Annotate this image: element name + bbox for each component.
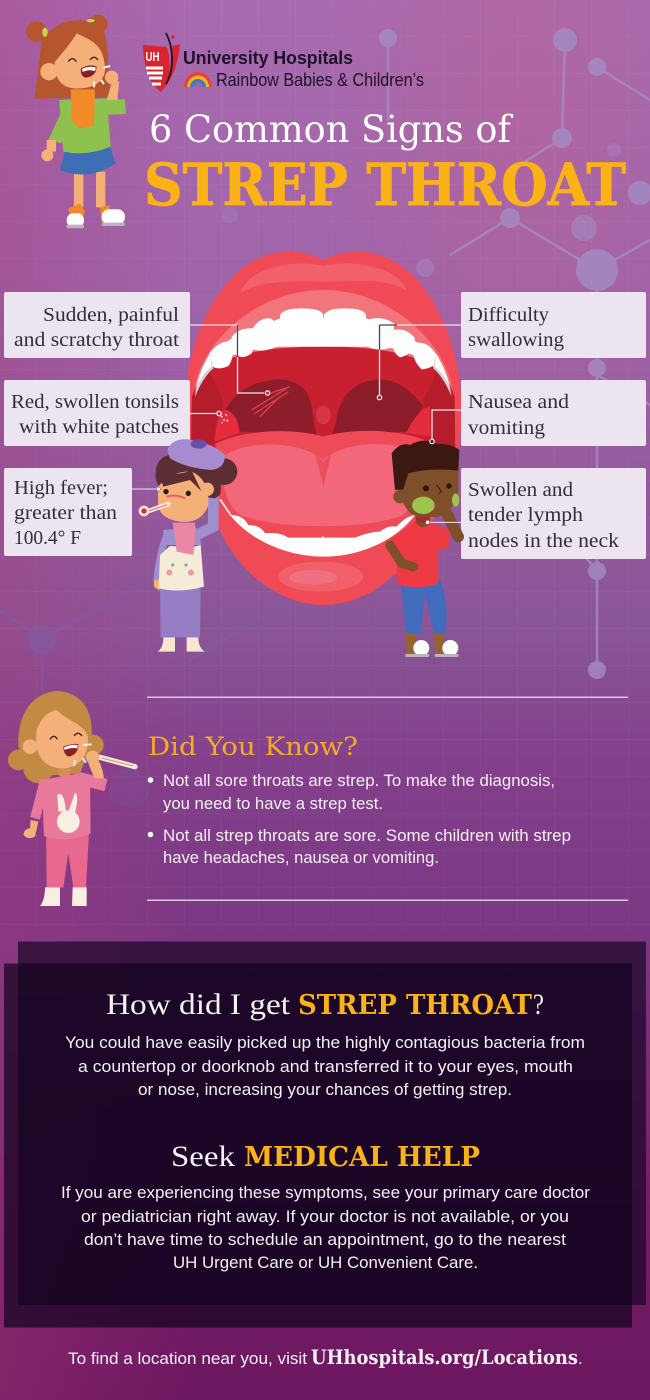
label: sudden painful throat: and scratchy throat xyxy=(14,329,179,351)
footer: To find a location near you, visit xyxy=(68,1349,307,1368)
throat interior xyxy=(191,347,455,453)
lymph callout dot xyxy=(430,521,462,524)
strep streaks xyxy=(252,387,290,417)
seek medical help section: Seek xyxy=(171,1140,235,1173)
label: nausea and vomiting xyxy=(461,380,646,446)
label: swollen lymph nodes: Swollen and xyxy=(468,479,573,501)
character: child with fever and ice pack xyxy=(132,439,237,652)
label: sudden painful throat: Sudden, painful xyxy=(43,304,179,326)
how did I get strep section: a countertop or doorknob and transferred it to your eyes, mouth xyxy=(78,1057,573,1076)
left tonsil xyxy=(215,410,239,442)
bullet 2: have headaches, nausea or vomiting. xyxy=(163,848,439,867)
dark panel back layer xyxy=(18,942,646,1305)
logo wordmark: University Hospitals xyxy=(183,47,353,68)
how did I get strep section: How did I get xyxy=(106,988,291,1021)
how did I get strep section xyxy=(65,988,585,1099)
footer: UHhospitals.org/Locations xyxy=(311,1345,578,1369)
seek medical help section: UH Urgent Care or UH Convenient Care. xyxy=(173,1253,478,1272)
mouth illustration xyxy=(185,252,462,605)
label: high fever: greater than xyxy=(14,502,117,524)
lips xyxy=(185,252,462,605)
upper gum xyxy=(193,290,453,397)
divider bottom xyxy=(147,900,628,901)
icon: rainbow xyxy=(184,72,212,87)
logo subtitle: Rainbow Babies & Children’s xyxy=(216,69,424,90)
right tonsil xyxy=(407,407,431,437)
did you know section xyxy=(148,732,571,867)
label: swollen lymph nodes: tender lymph xyxy=(468,504,583,526)
title: 6 Common Signs of xyxy=(149,108,513,151)
label: nausea and vomiting: vomiting xyxy=(468,417,545,439)
character: girl coughing with scarf xyxy=(26,15,126,228)
label: swollen lymph nodes: nodes in the neck xyxy=(468,530,620,552)
callout leader lines xyxy=(190,325,461,444)
seek medical help section: If you are experiencing these symptoms, see your primary care doctor xyxy=(61,1183,590,1202)
throat arch shadow xyxy=(223,379,317,435)
label: high fever: 100.4° F xyxy=(14,527,81,549)
bullet 2: Not all strep throats are sore. Some children with strep xyxy=(163,826,571,845)
fever callout dot xyxy=(132,487,156,490)
label: red swollen tonsils xyxy=(4,380,190,446)
uvula xyxy=(316,406,331,424)
did you know section: Did You Know? xyxy=(148,732,358,761)
icon: UH shield xyxy=(143,33,180,92)
icon: UH shield: UH xyxy=(146,50,160,64)
label: difficulty swallowing: swallowing xyxy=(468,329,564,351)
how did I get strep section: ? xyxy=(533,988,544,1021)
lower teeth xyxy=(230,515,415,557)
upper teeth xyxy=(209,308,437,369)
bullet 1 xyxy=(148,771,555,813)
how did I get strep section: You could have easily picked up the highly contagious bacteria from xyxy=(65,1033,585,1052)
bullet 1: you need to have a strep test. xyxy=(163,794,383,813)
tongue xyxy=(215,431,428,555)
label: sudden painful throat xyxy=(4,292,190,358)
label: high fever: High fever; xyxy=(14,477,108,499)
title xyxy=(144,108,626,219)
dark panel front layer xyxy=(4,964,632,1328)
character: girl with thermometer xyxy=(8,691,135,906)
seek medical help section: don’t have time to schedule an appointment, go to the nearest xyxy=(84,1230,566,1249)
logo xyxy=(143,33,424,92)
label: red swollen tonsils: Red, swollen tonsils xyxy=(11,391,179,413)
white patches xyxy=(221,414,228,423)
background molecule network xyxy=(0,28,650,808)
bullet 2 xyxy=(148,826,571,867)
label: difficulty swallowing xyxy=(461,292,646,358)
bullet 1: Not all sore throats are strep. To make the diagnosis, xyxy=(163,771,555,790)
label: swollen lymph nodes xyxy=(461,468,646,559)
seek medical help section: MEDICAL HELP xyxy=(244,1142,480,1173)
character: boy with nausea and swollen lymph nodes xyxy=(388,441,462,657)
label: nausea and vomiting: Nausea and xyxy=(468,391,569,413)
lower lip highlight xyxy=(278,562,363,592)
footer: . xyxy=(578,1349,583,1368)
label: red swollen tonsils: with white patches xyxy=(19,416,179,438)
label: difficulty swallowing: Difficulty xyxy=(468,304,550,326)
seek medical help section: or pediatrician right away. If your doctor is not available, or you xyxy=(81,1207,569,1226)
label: high fever xyxy=(4,468,132,556)
footer xyxy=(68,1345,583,1369)
seek medical help section xyxy=(61,1140,590,1272)
how did I get strep section: or nose, increasing your chances of getting strep. xyxy=(138,1080,512,1099)
divider top xyxy=(147,696,628,698)
how did I get strep section: STREP THROAT xyxy=(298,990,532,1021)
